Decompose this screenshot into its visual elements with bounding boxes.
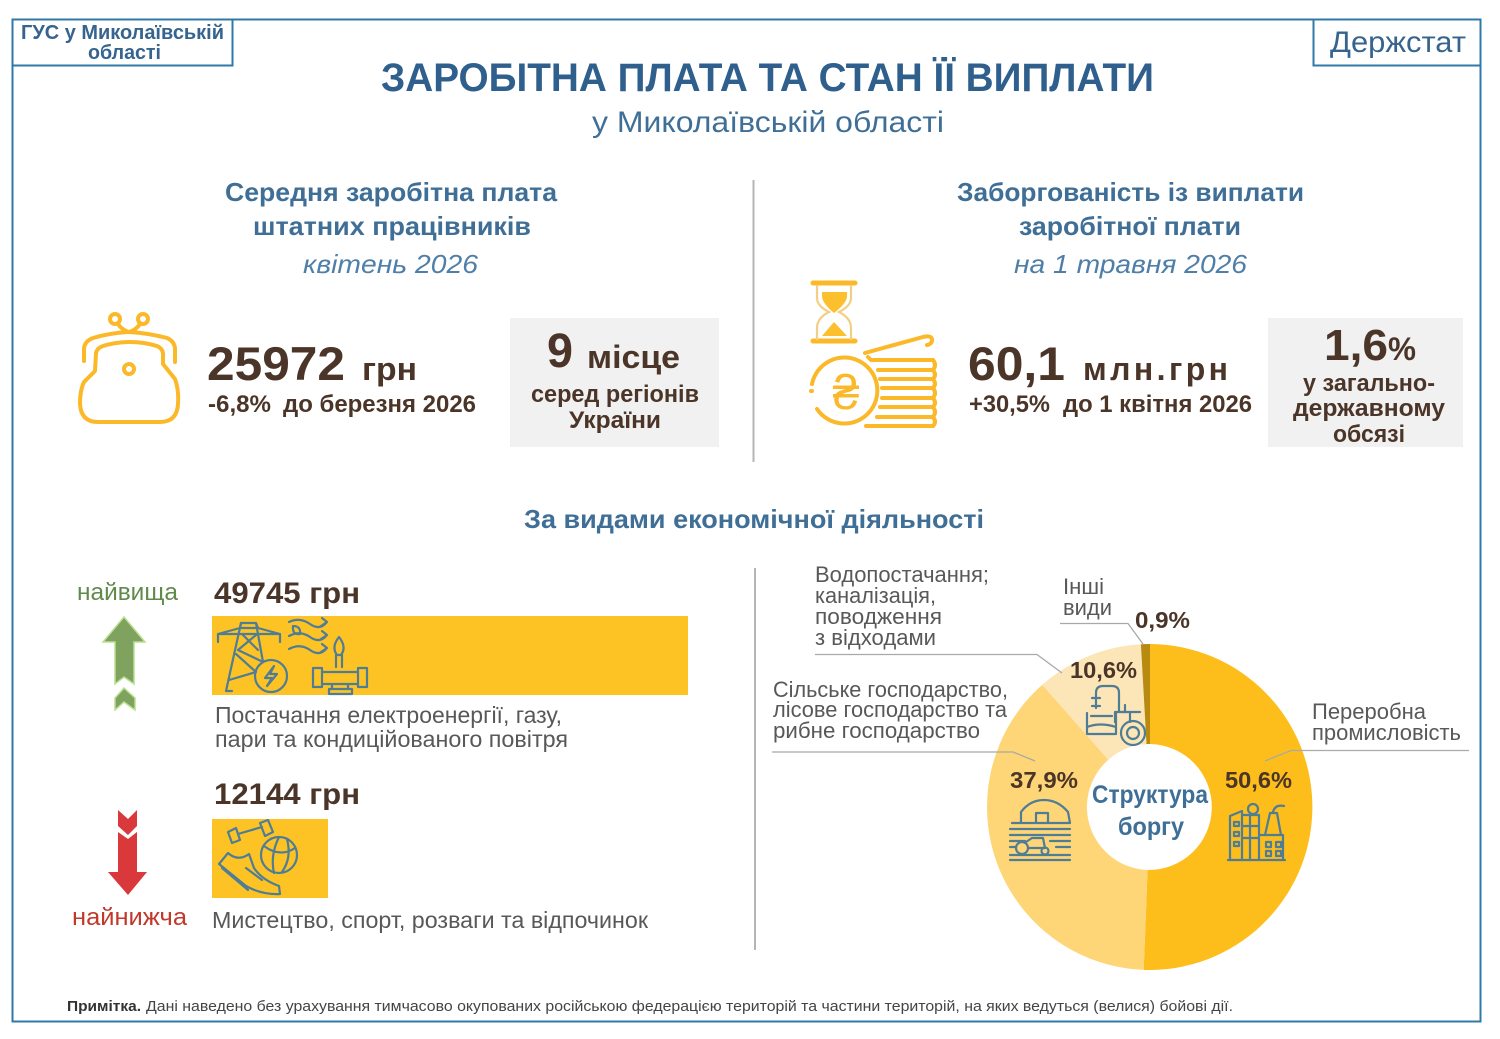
label: other: види: [1063, 595, 1112, 620]
icon: electricity, gas and steam: [218, 618, 367, 694]
heading: by economic activity: За видами економічної діяльності: [524, 504, 984, 534]
label: agriculture: [773, 677, 1008, 743]
icon: hourglass: [813, 283, 855, 341]
arrow: up: [103, 617, 145, 710]
label: water supply: поводження: [815, 604, 942, 629]
label: other: [1063, 574, 1112, 620]
slice: processing industry 50.6%: [1144, 644, 1312, 970]
arrow: down: [108, 810, 147, 895]
value: arrears: до 1 квітня 2026: [1063, 391, 1252, 418]
panel: region rank: [510, 318, 719, 447]
icon: sport and recreation: [219, 820, 297, 894]
text: highest wage activity: Постачання електроенергії, газу,: [215, 702, 562, 728]
heading: average salary: штатних працівників: [253, 211, 531, 241]
icon: farm: [1010, 800, 1070, 860]
slice: other 0.9%: [1141, 644, 1150, 744]
percent labels: 10,6%: [1070, 657, 1137, 683]
label: water supply: каналізація,: [815, 583, 936, 608]
panel: share of national total: у загально-: [1303, 370, 1435, 397]
donut chart: debt structure: [987, 644, 1312, 970]
value: average salary: [207, 337, 476, 418]
icon: stack of hryvnia coins: ₴: [833, 367, 860, 420]
slice: water supply 10.6%: [1042, 644, 1146, 760]
value: arrears: [968, 337, 1252, 418]
icon: purse: [80, 314, 178, 422]
heading: wage arrears: [957, 177, 1304, 279]
text: lowest wage activity: Мистецтво, спорт, розваги та відпочинок: [212, 907, 649, 933]
donut centre label: [1092, 781, 1209, 841]
value: highest wage: 49745 грн: [214, 577, 360, 610]
text: highest wage activity: пари та кондиційованого повітря: [215, 726, 568, 752]
value: average salary: до березня 2026: [283, 391, 476, 418]
label: agriculture: Сільське господарство,: [773, 677, 1008, 702]
heading: wage arrears: на 1 травня 2026: [1014, 249, 1248, 279]
label: processing industry: Переробна: [1312, 699, 1427, 724]
icon: factory: [1228, 804, 1285, 860]
panel: share of national total: обсязі: [1333, 421, 1405, 448]
value: average salary: -6,8%: [208, 391, 271, 418]
label: processing industry: [1312, 699, 1461, 745]
label: processing industry: промисловість: [1312, 720, 1461, 745]
value: arrears: +30,5%: [969, 391, 1050, 418]
value: arrears: 60,1: [968, 337, 1065, 390]
icon: water supply: [1087, 686, 1145, 745]
footnote: Примітка.: [67, 998, 141, 1015]
heading: wage arrears: Заборгованість із виплати: [957, 177, 1304, 207]
value: average salary: 25972: [207, 337, 345, 390]
footnote: Дані наведено без урахування тимчасово окупованих російською федерацією територій та частини територій, на яких ведуться (велися) бойові дії.: [146, 998, 1233, 1015]
heading: average salary: квітень 2026: [303, 249, 479, 279]
value: arrears: млн.грн: [1083, 351, 1228, 387]
label: water supply: [815, 562, 989, 650]
bar: highest wage: [212, 616, 688, 695]
donut centre label: боргу: [1118, 813, 1184, 841]
subtitle: у Миколаївській області: [592, 106, 944, 139]
heading: average salary: Середня заробітна плата: [225, 177, 558, 207]
label: agriculture: лісове господарство та: [773, 697, 1008, 722]
leader lines: [772, 624, 1469, 761]
label: agriculture: рибне господарство: [773, 718, 980, 743]
label: other: Інші: [1063, 574, 1104, 599]
tag: regional office: ГУС у Миколаївській: [21, 22, 224, 44]
donut centre label: Структура: [1092, 781, 1209, 809]
percent labels: [1010, 607, 1292, 793]
percent labels: 50,6%: [1225, 767, 1292, 793]
percent labels: 0,9%: [1135, 607, 1190, 633]
value: average salary: грн: [362, 351, 417, 387]
label: lowest: найнижча: [72, 904, 188, 931]
panel: region rank: 9: [547, 325, 573, 378]
title: ЗАРОБІТНА ПЛАТА ТА СТАН ЇЇ ВИПЛАТИ: [381, 56, 1154, 100]
tag: regional office: області: [88, 42, 161, 64]
label: water supply: Водопостачання;: [815, 562, 989, 587]
percent labels: 37,9%: [1010, 767, 1078, 793]
icon: stack of hryvnia coins: [811, 336, 935, 426]
tag: Derzhstat: Держстат: [1330, 26, 1466, 59]
bar: lowest wage: [212, 819, 328, 898]
panel: share of national total: 1,6: [1324, 321, 1388, 370]
label: water supply: з відходами: [815, 625, 936, 650]
panel: share of national total: державному: [1293, 395, 1446, 422]
panel: region rank: серед регіонів: [531, 381, 699, 408]
panel: share of national total: [1268, 318, 1463, 448]
heading: average salary: [225, 177, 558, 279]
tag: Derzhstat: [1314, 20, 1480, 66]
panel: region rank: місце: [587, 339, 680, 375]
panel: share of national total: %: [1388, 331, 1416, 367]
tag: regional office: [12, 20, 232, 66]
value: lowest wage: 12144 грн: [214, 778, 360, 811]
panel: region rank: України: [569, 407, 661, 434]
text: highest wage activity: [215, 702, 568, 752]
slice: agriculture 37.9%: [987, 685, 1148, 970]
label: highest: найвища: [77, 579, 179, 606]
heading: wage arrears: заробітної плати: [1019, 211, 1241, 241]
